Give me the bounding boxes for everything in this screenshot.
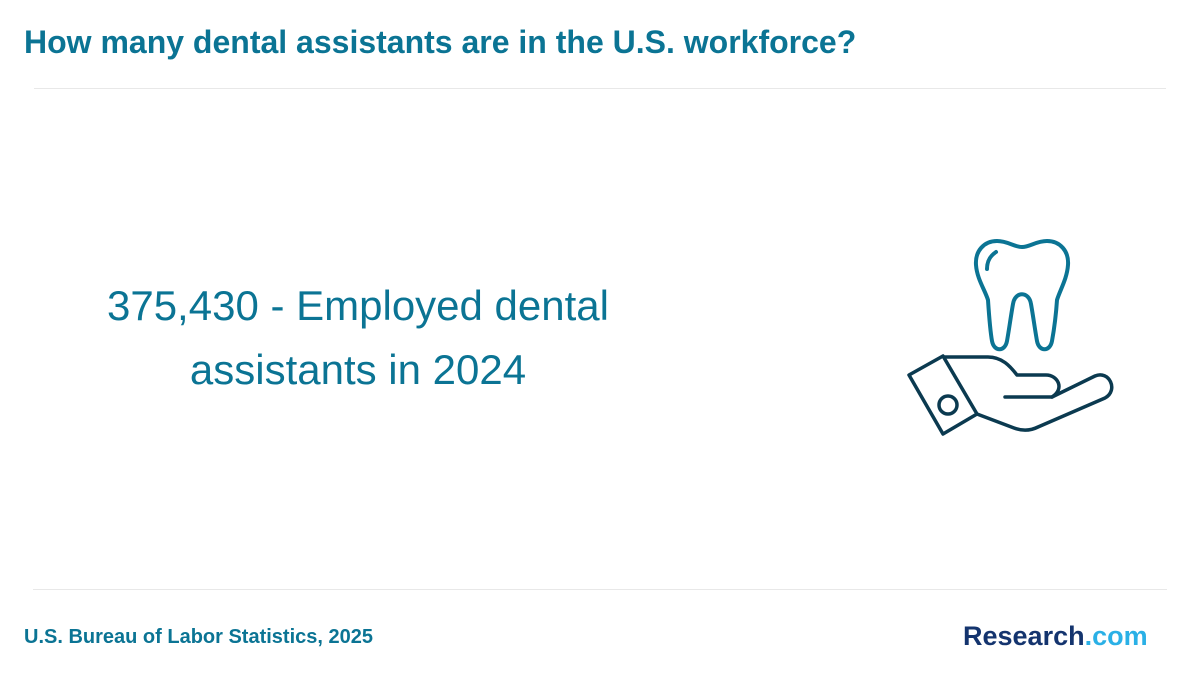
title: How many dental assistants are in the U.S. workforce? — [24, 24, 856, 60]
main statistic: assistants in 2024 — [190, 346, 526, 393]
main statistic: 375,430 - Employed dental — [107, 282, 609, 329]
icon: hand — [909, 356, 1112, 434]
main statistic — [107, 282, 609, 393]
source text: U.S. Bureau of Labor Statistics, 2025 — [24, 626, 373, 648]
logo: Research.com: Research.com — [963, 621, 1148, 651]
icon: hand holding tooth — [907, 239, 1114, 436]
icon: tooth — [976, 241, 1068, 349]
